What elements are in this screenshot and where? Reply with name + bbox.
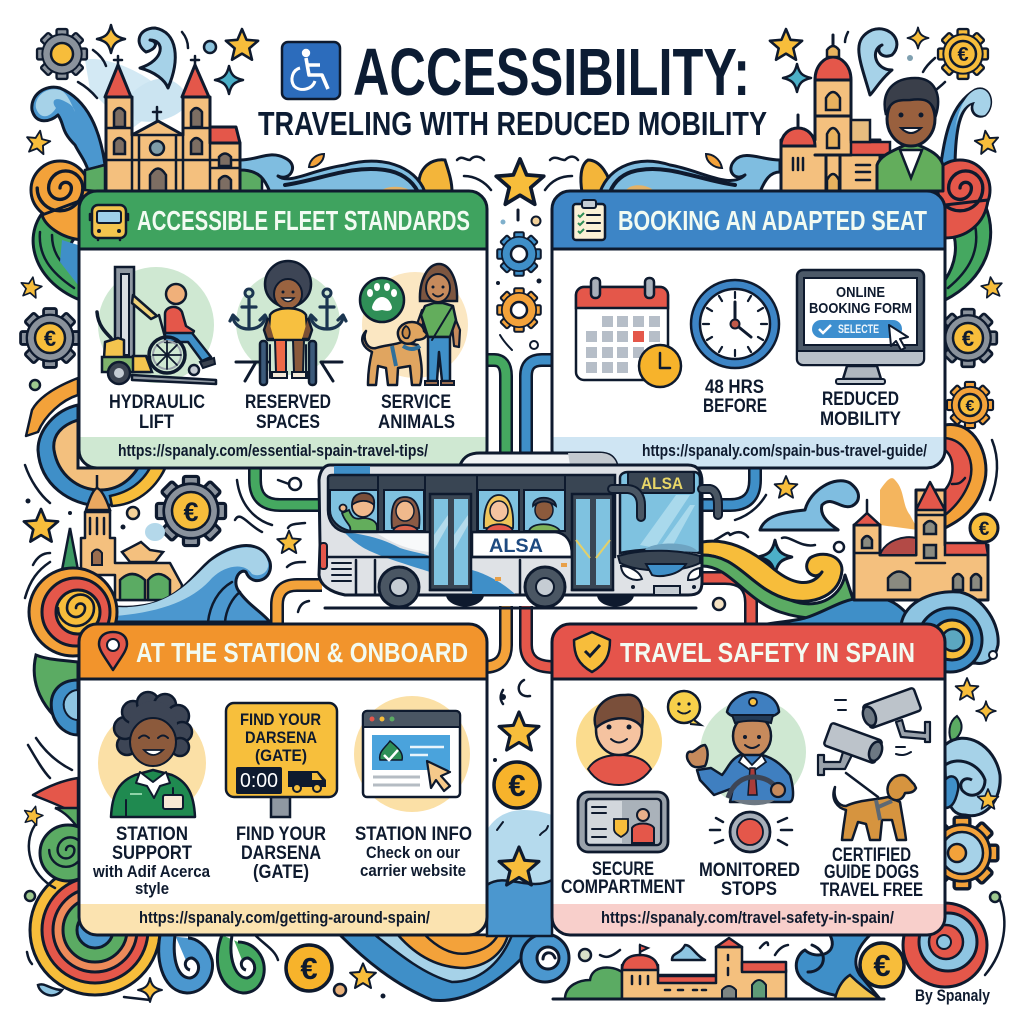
panel header: station [79,624,487,679]
label: secure compartment: SECURE [592,859,654,880]
centre column lower with stars and coin: € [508,768,526,803]
label: monitored stops [699,860,800,900]
bus branding: ALSA [489,536,543,557]
icon: service animals [360,264,468,385]
decoration: bottom centre bands [340,934,569,1001]
decoration: bottom right spiral [903,903,987,987]
label: reserved spaces: SPACES [256,412,320,433]
icon: reserved wheelchair spaces [230,261,346,385]
decoration: left leaf and green spiral [22,778,96,888]
panel: accessible fleet standards [79,191,487,468]
icon: online booking form monitor: SELECTE [838,322,879,336]
link strip: fleet: https://spanaly.com/essential-spain-travel-tips/ [118,441,428,460]
title: TRAVELING WITH REDUCED MOBILITY [258,105,767,142]
icon: online booking form monitor: BOOKING FORM [809,300,912,317]
label: hydraulic lift: LIFT [139,412,174,433]
connector lines to bus [255,360,755,667]
church: top left [105,56,240,191]
icon: station website [354,696,470,812]
church: top right [781,35,890,191]
label: reduced mobility: MOBILITY [820,409,901,430]
label: secure compartment: COMPARTMENT [561,877,685,898]
decoration: coin and swirl right [901,514,998,672]
icon: hydraulic lift [97,267,216,384]
panel header: safety: TRAVEL SAFETY IN SPAIN [620,637,915,668]
decoration: top centre waves [240,154,780,192]
link strip: station [79,904,487,935]
icon: online booking form monitor [797,270,924,384]
label: 48 hrs before: 48 HRS [705,377,764,398]
traveller portrait [877,78,943,191]
bus [319,453,718,608]
decoration: left side gears and bands: € [44,326,56,351]
decoration: left side gears and bands [21,309,165,598]
link strip: fleet [79,437,487,468]
label: station info: Check on our [366,843,460,862]
decoration: top right waves and gear [770,28,1004,300]
bus windshield [612,472,718,595]
panel header: safety [552,624,945,679]
label: station support: SUPPORT [112,843,192,864]
decoration: bottom right waves [579,935,880,999]
label: find your darsena: (GATE) [253,862,309,883]
link strip: safety: https://spanaly.com/travel-safety-in-spain/ [601,908,894,927]
panel: at the station and onboard [79,624,487,935]
icon: station support agent [98,692,206,817]
icon: map pin [99,632,127,670]
icon: clipboard checklist [573,200,605,240]
label: service animals: SERVICE [381,392,451,413]
label: station support: STATION [116,824,188,845]
decoration: centre column top with star and gears [496,159,544,350]
label: service animals: ANIMALS [378,412,455,433]
label: hydraulic lift: HYDRAULIC [109,392,205,413]
icon: wheelchair accessibility [282,42,340,99]
label: station support: style [135,879,169,898]
panel header: booking [552,191,945,249]
decoration: right middle clouds and swirls [702,476,918,625]
decoration: top left waves and gear [19,25,262,300]
icon: online booking form monitor: ONLINE [836,284,885,301]
bus windshield: ALSA [641,474,683,493]
label: station support [92,824,210,898]
signature: By Spanaly [915,986,990,1005]
decoration: bottom swirls and coins: € [300,951,318,986]
bus doors [430,494,613,590]
link strip: booking [552,437,945,468]
label: certified guide dogs [820,845,923,901]
title: ACCESSIBILITY: [353,35,750,110]
label: find your darsena: DARSENA [241,843,321,864]
icon: secure compartment [578,792,668,852]
icon: stop button [710,812,792,852]
euro coin bottom right: € [873,948,891,983]
decoration: euro gear lower left [156,476,305,567]
decoration: swirl lower left [28,568,117,778]
label: station info: STATION INFO [355,824,472,845]
title [258,35,767,142]
centre column lower with stars and coin [487,680,552,936]
icon: darsena gate sign [226,703,337,817]
label: reserved spaces: RESERVED [245,392,331,413]
label: 48 hrs before: BEFORE [703,396,767,417]
link strip: booking: https://spanaly.com/spain-bus-travel-guide/ [642,441,927,460]
label: reduced mobility: REDUCED [822,389,899,410]
label: 48 hrs before [703,377,767,417]
icon: darsena gate sign: FIND YOUR [240,710,321,729]
link strip: safety [552,904,945,935]
label: find your darsena [236,824,326,883]
label: monitored stops: MONITORED [699,860,800,881]
decoration: right side gears and bands: € [962,326,974,351]
icon: guide dog [833,773,916,840]
bus wheels [379,567,565,607]
label: station info: carrier website [360,861,466,880]
decoration: top right waves and gear: € [957,44,969,66]
castle bottom [553,938,884,999]
label: station support: with Adif Acerca [92,862,210,881]
bus rear details [320,543,351,581]
decoration: bottom swirls and coins [124,935,399,1002]
euro coin bottom right [860,943,904,987]
icon: driver and smiley [668,691,806,805]
label: secure compartment [561,859,685,898]
icon: darsena gate sign: DARSENA [245,728,317,747]
icon: security cameras [818,687,930,775]
panel header: fleet: ACCESSIBLE FLEET STANDARDS [137,205,470,236]
label: find your darsena: FIND YOUR [236,824,326,845]
decoration: right side gears and bands: € [966,398,975,415]
label: hydraulic lift [109,392,205,433]
icon: shield [574,632,610,672]
passengers on bus [340,493,560,531]
decoration: right side gears and bands [939,309,997,528]
label: station info [355,824,472,880]
icon: bus [90,205,128,240]
label: service animals [378,392,455,433]
decoration: right lower bands [926,651,1004,975]
link strip: station: https://spanaly.com/getting-around-spain/ [139,908,430,927]
panel header: booking: BOOKING AN ADAPTED SEAT [618,205,927,236]
label: reserved spaces [245,392,331,433]
decoration: bottom left rainbow spiral [25,865,160,995]
panel: travel safety in spain [552,624,945,935]
label: reduced mobility [820,389,901,430]
icon: darsena gate sign: (GATE) [255,746,307,765]
panel header: station: AT THE STATION & ONBOARD [136,637,468,668]
label: certified guide dogs: TRAVEL FREE [820,880,923,901]
town: lower left [62,475,182,600]
decoration: euro gear lower left: € [183,497,199,527]
church: lower right [854,482,988,600]
icon: passenger portrait [576,695,662,785]
icon: darsena gate sign: 0:00 [240,770,278,792]
panel: booking an adapted seat [552,191,945,468]
label: certified guide dogs: GUIDE DOGS [824,862,919,883]
decoration: coin and swirl right: € [979,519,990,540]
label: monitored stops: STOPS [721,879,777,900]
label: certified guide dogs: CERTIFIED [832,845,911,866]
decoration: wave lower left [115,546,270,622]
icon: clock [691,280,779,368]
panel header: fleet [79,191,487,249]
icon: calendar [576,278,681,387]
